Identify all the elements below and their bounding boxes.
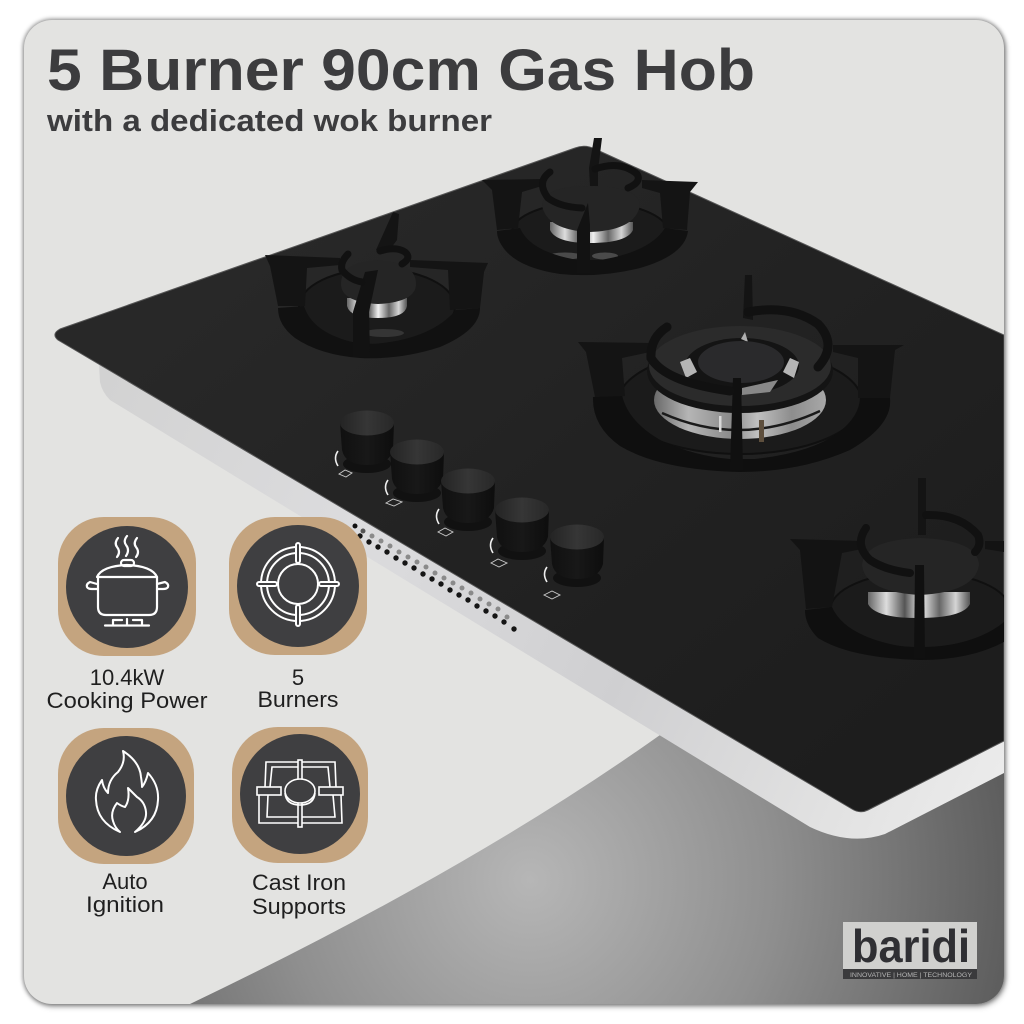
feature: auto ignition xyxy=(58,728,194,917)
black glass hob surface xyxy=(55,146,1004,812)
badge xyxy=(58,517,196,656)
burner: rear left xyxy=(265,212,488,358)
subtitle: with a dedicated wok burner xyxy=(46,103,492,138)
badge xyxy=(229,517,367,655)
vent holes xyxy=(352,524,517,632)
feature: cooking power xyxy=(46,517,208,713)
label: Auto xyxy=(102,869,148,894)
burner: front right xyxy=(790,478,1010,660)
steel burner ring xyxy=(654,390,826,439)
stainless steel hob edge xyxy=(99,365,1004,839)
logo: baridi: baridi xyxy=(852,920,970,972)
icon: steaming pot on burner xyxy=(87,536,168,626)
label: 10.4kW xyxy=(90,665,165,690)
badge xyxy=(232,727,368,863)
icon: pan support xyxy=(257,760,343,827)
knob 5 xyxy=(544,524,604,599)
control knobs xyxy=(336,410,604,599)
burner: rear right xyxy=(482,138,698,275)
burner: large wok burner xyxy=(578,275,904,472)
title: 5 Burner 90cm Gas Hob xyxy=(47,38,755,103)
badge xyxy=(58,728,194,864)
grey curved floor xyxy=(190,735,1004,1004)
logo: baridi: INNOVATIVE | HOME | TECHNOLOGY xyxy=(850,972,972,979)
label: Ignition xyxy=(86,892,164,917)
label: 5 xyxy=(292,665,304,690)
main illustration xyxy=(55,138,1010,1004)
label: Supports xyxy=(252,894,346,919)
knob 2 xyxy=(386,440,444,506)
knob 1 xyxy=(336,410,394,477)
feature: burners xyxy=(229,517,367,712)
label: Cast Iron xyxy=(252,870,346,895)
knob 3 xyxy=(436,468,495,536)
label: Burners xyxy=(258,687,338,712)
icon: burner rings xyxy=(257,543,339,626)
label: Cooking Power xyxy=(46,688,208,713)
feature: cast iron supports xyxy=(232,727,368,919)
knob 4 xyxy=(490,498,549,567)
icon: flame xyxy=(96,751,158,832)
